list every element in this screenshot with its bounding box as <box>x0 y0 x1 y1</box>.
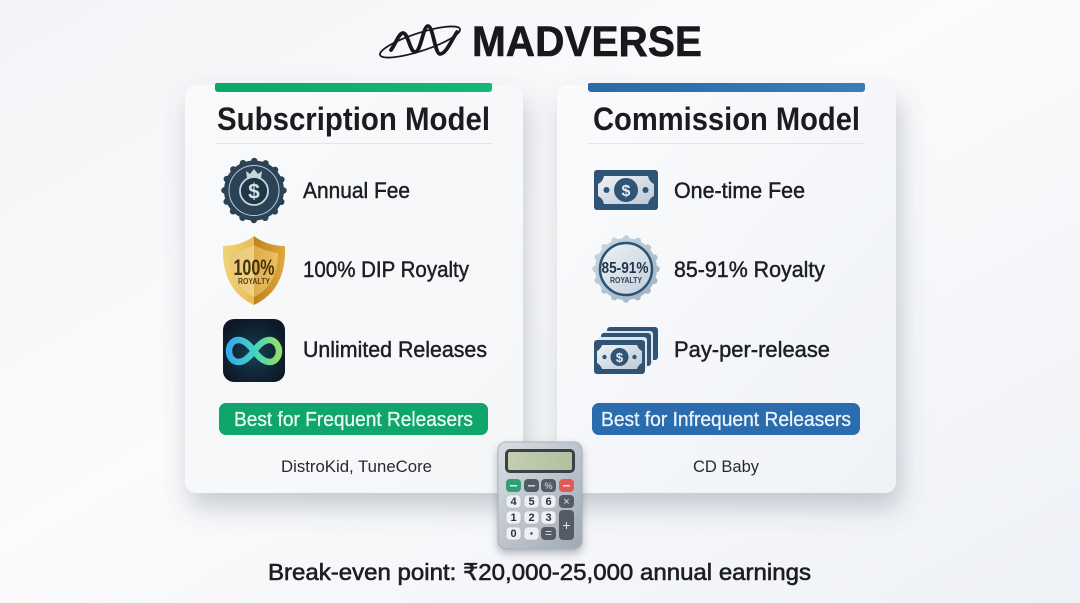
icon: 100% royalty shield: ROYALTY <box>238 277 271 286</box>
icon: calculator: 4 <box>510 496 517 508</box>
icon: annual fee seal: $ <box>248 180 260 204</box>
icon: calculator: 2 <box>528 512 535 524</box>
label: unlimited releases: Unlimited Releases <box>303 337 487 362</box>
icon: calculator: 6 <box>545 496 552 508</box>
icon: orbit wave mark <box>377 20 463 64</box>
icon: 85-91% royalty seal: ROYALTY <box>610 276 643 285</box>
icon: 85-91% royalty seal <box>595 238 657 300</box>
card background <box>185 85 523 493</box>
icon: calculator: = <box>545 526 552 540</box>
icon: stacked bills: $ <box>616 350 624 365</box>
icon: 100% royalty shield: 100% <box>234 255 274 280</box>
wordmark: MADVERSE <box>472 18 702 66</box>
icon: calculator: + <box>562 517 571 533</box>
panel: subscription model <box>185 83 523 493</box>
icon: calculator: 3 <box>545 512 552 524</box>
badge: best for frequent releasers <box>219 403 488 435</box>
badge: best for infrequent releasers: Best for Infrequent Releasers <box>601 409 851 431</box>
label: pay-per-release: Pay-per-release <box>674 337 830 362</box>
heading: subscription model: Subscription Model <box>217 101 490 137</box>
examples: distrokid, tunecore: DistroKid, TuneCore <box>281 457 432 476</box>
panel: commission model <box>557 83 896 493</box>
icon: 100% royalty shield <box>223 236 285 305</box>
icon: one-time fee bill <box>594 170 658 210</box>
green top bar <box>215 83 492 92</box>
badge: best for infrequent releasers <box>592 403 860 435</box>
icon: calculator: 5 <box>528 496 535 508</box>
icon: calculator: × <box>563 496 570 508</box>
label: one-time fee: One-time Fee <box>674 178 805 203</box>
icon: annual fee seal <box>224 160 284 220</box>
icon: calculator: 0 <box>510 528 517 540</box>
icon: stacked bills <box>594 327 658 374</box>
label: 100% dip royalty: 100% DIP Royalty <box>303 257 469 282</box>
label: annual fee: Annual Fee <box>303 178 410 203</box>
label: 85-91% royalty: 85-91% Royalty <box>674 257 825 282</box>
card background <box>557 85 896 493</box>
footer: break-even point: Break-even point: ₹20,000-25,000 annual earnings <box>268 559 811 585</box>
icon: 85-91% royalty seal: 85-91% <box>602 260 648 277</box>
icon: calculator: % <box>544 481 553 491</box>
badge: best for frequent releasers: Best for Frequent Releasers <box>234 409 473 431</box>
blue top bar <box>588 83 865 92</box>
brand logo <box>377 18 702 66</box>
icon: calculator: 1 <box>510 512 517 524</box>
icon: calculator <box>498 442 582 549</box>
icon: unlimited infinity tile <box>223 319 285 382</box>
icon: one-time fee bill: $ <box>622 183 631 200</box>
heading: commission model: Commission Model <box>593 101 860 137</box>
examples: cd baby: CD Baby <box>693 457 759 476</box>
